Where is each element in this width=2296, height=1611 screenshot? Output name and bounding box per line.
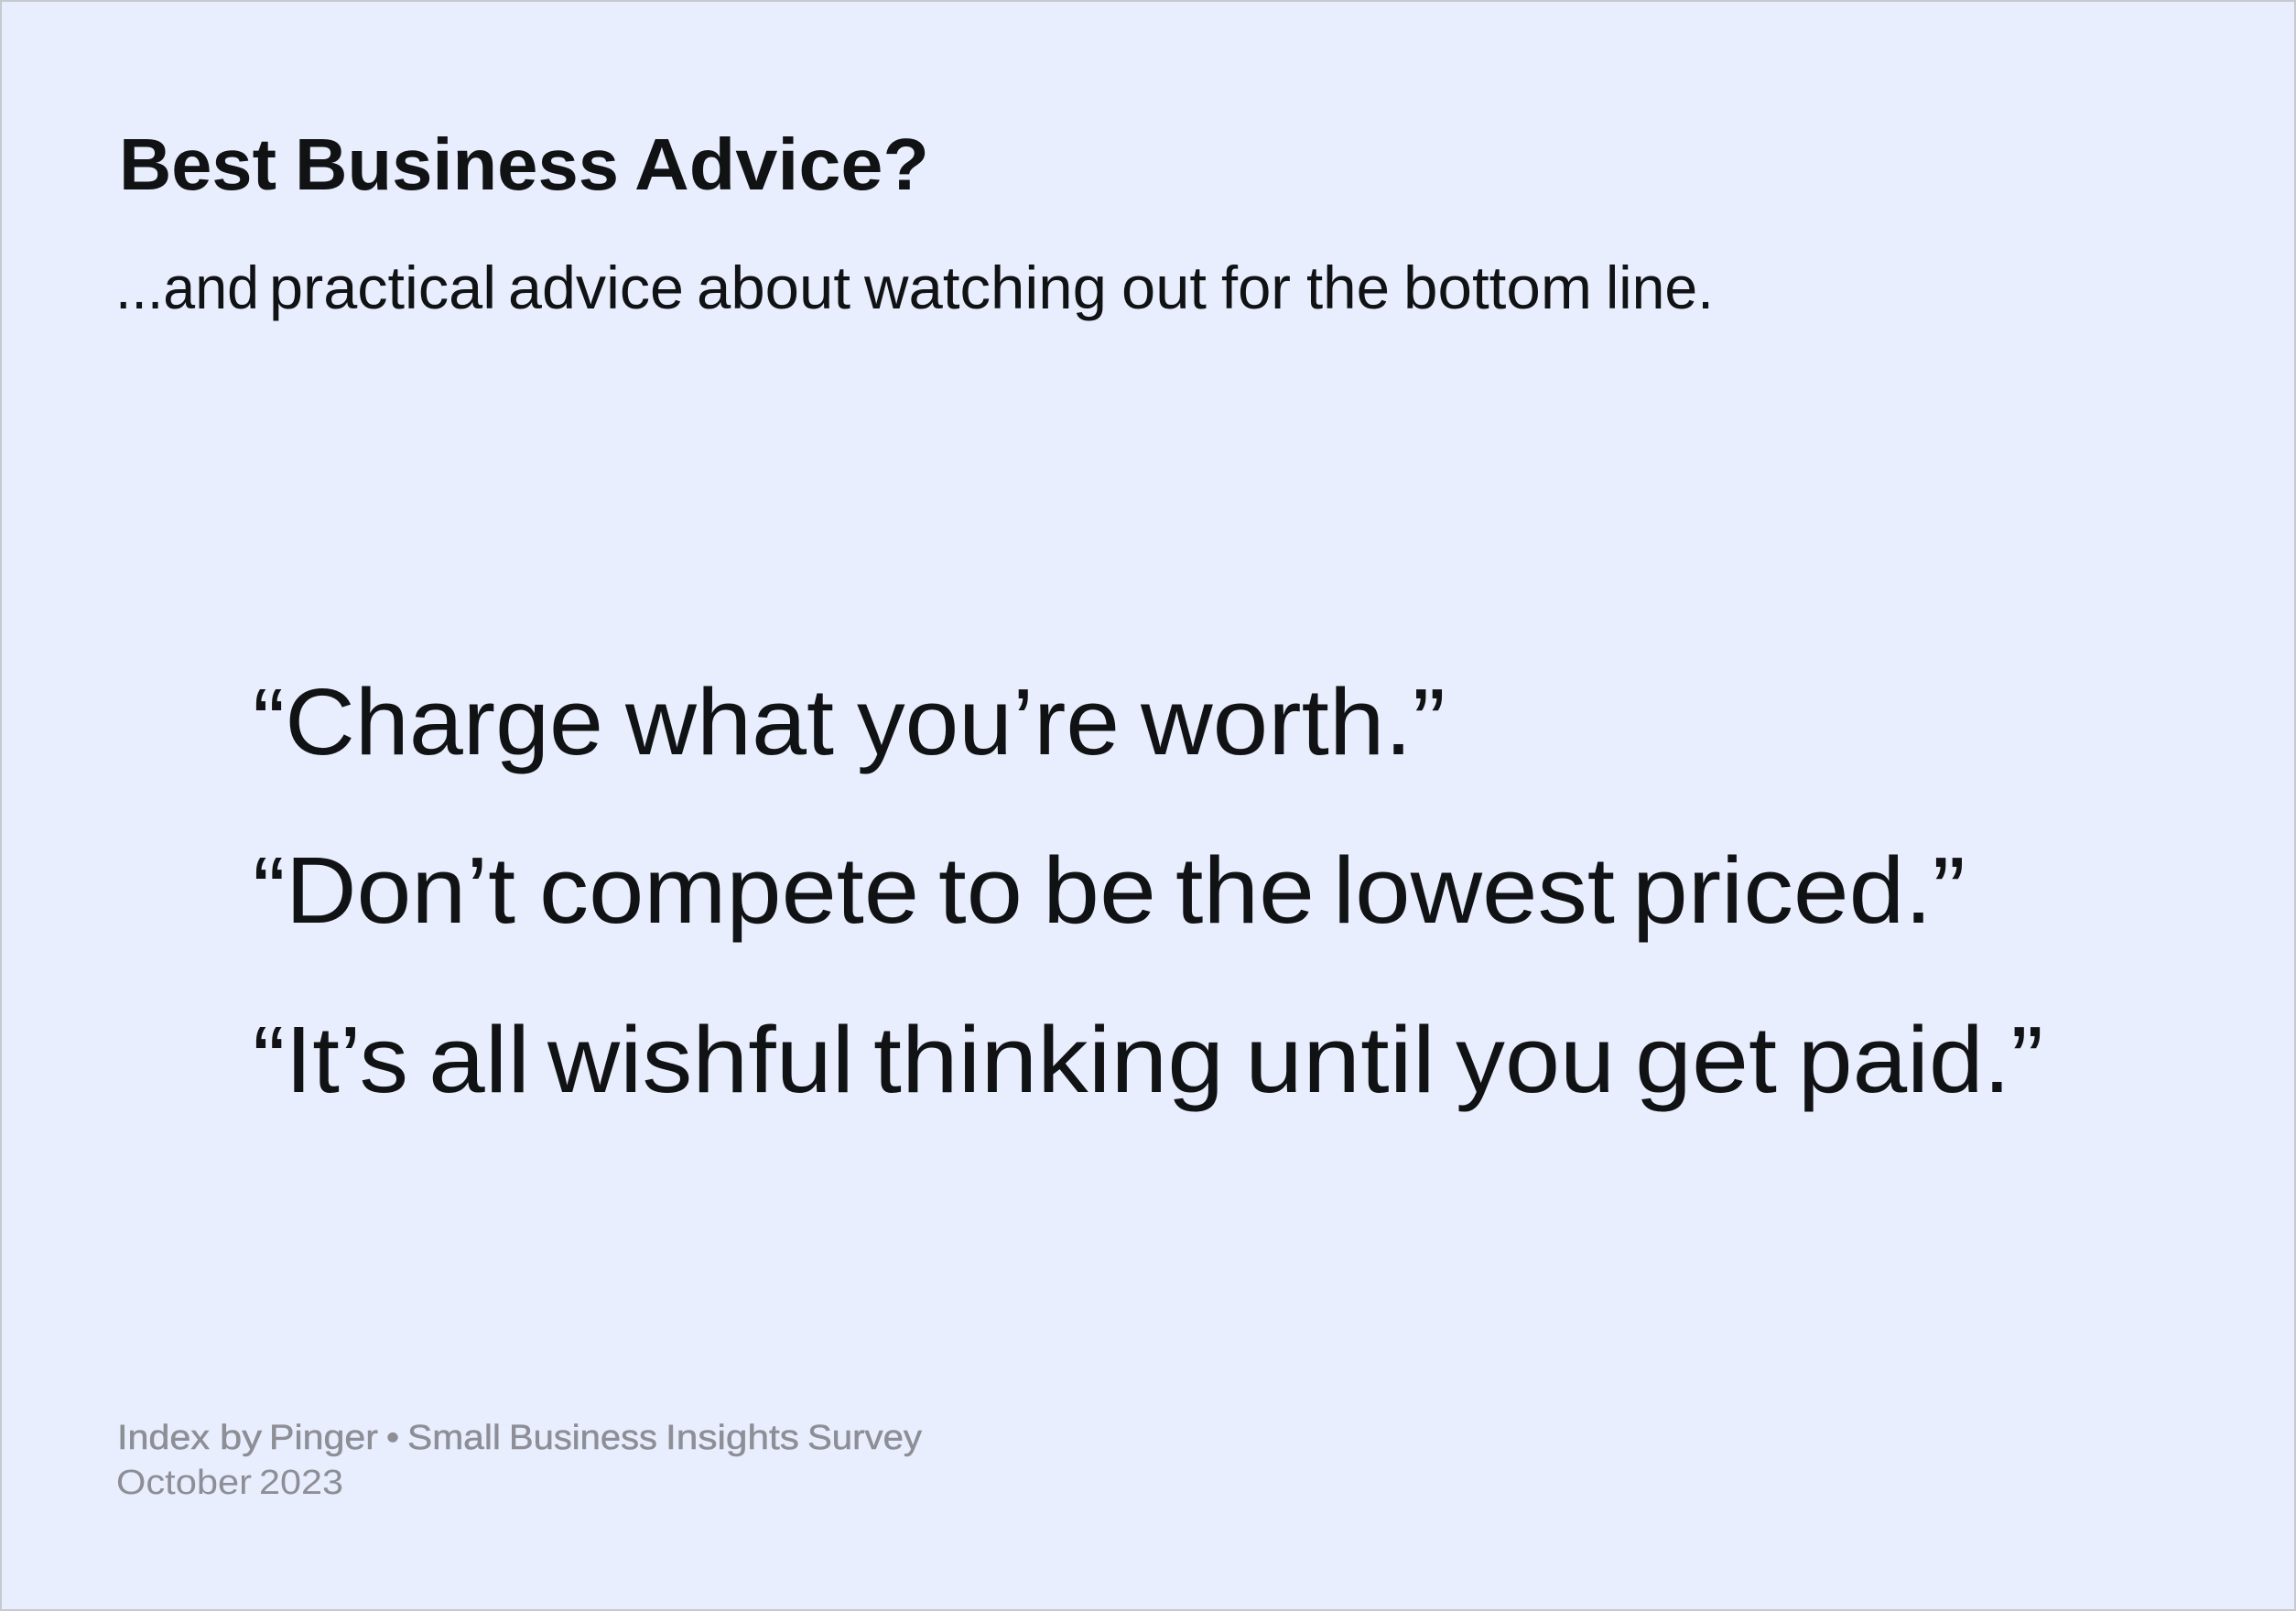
source line: Survey [807, 1419, 922, 1457]
quote: it's all wishful thinking until you get paid: until [1245, 1007, 1435, 1112]
subtitle: bottom [1403, 254, 1592, 321]
quote: charge what you're worth: worth.” [1140, 669, 1446, 774]
quote: it's all wishful thinking until you get paid: you [1456, 1007, 1615, 1112]
source line: Pinger [269, 1419, 378, 1457]
quote: it's all wishful thinking until you get paid: wishful [547, 1007, 854, 1112]
quotes block [253, 669, 2043, 1112]
quote: don't compete to be the lowest priced: lowest [1333, 838, 1615, 943]
quote: don't compete to be the lowest priced: to [938, 838, 1023, 943]
quote: charge what you're worth: what [624, 669, 834, 774]
title: Business [295, 124, 619, 205]
title: Advice? [634, 124, 929, 205]
subtitle: line. [1606, 254, 1714, 321]
quote: it's all wishful thinking until you get paid: “It’s [253, 1007, 408, 1112]
subtitle: out [1121, 254, 1207, 321]
quote: it's all wishful thinking until you get paid: get [1635, 1007, 1777, 1112]
subtitle: ...and [115, 254, 259, 321]
quote: don't compete to be the lowest priced: “Don’t [253, 838, 515, 943]
source line: • [386, 1419, 399, 1457]
subtitle: for [1221, 254, 1291, 321]
quote: don't compete to be the lowest priced: priced.” [1632, 838, 1966, 943]
quote: it's all wishful thinking until you get paid: thinking [873, 1007, 1224, 1112]
source line: by [220, 1419, 262, 1457]
subtitle: advice [508, 254, 684, 321]
quote: don't compete to be the lowest priced: compete [539, 838, 919, 943]
quote: don't compete to be the lowest priced: be [1043, 838, 1156, 943]
source line: Small [407, 1419, 501, 1457]
title: Best [119, 124, 276, 205]
quote: it's all wishful thinking until you get paid: all [428, 1007, 530, 1112]
date line: October [116, 1464, 252, 1502]
subtitle: the [1306, 254, 1390, 321]
source line: Index [117, 1419, 210, 1457]
source footer [116, 1419, 922, 1502]
quote: it's all wishful thinking until you get paid: paid.” [1798, 1007, 2043, 1112]
source line: Business [509, 1419, 657, 1457]
date line: 2023 [259, 1464, 343, 1502]
quote: charge what you're worth: “Charge [253, 669, 603, 774]
subtitle: watching [863, 254, 1107, 321]
quote: charge what you're worth: you’re [857, 669, 1120, 774]
quote: don't compete to be the lowest priced: the [1175, 838, 1315, 943]
subtitle: practical [269, 254, 496, 321]
subtitle: about [697, 254, 850, 321]
source line: Insights [666, 1419, 799, 1457]
